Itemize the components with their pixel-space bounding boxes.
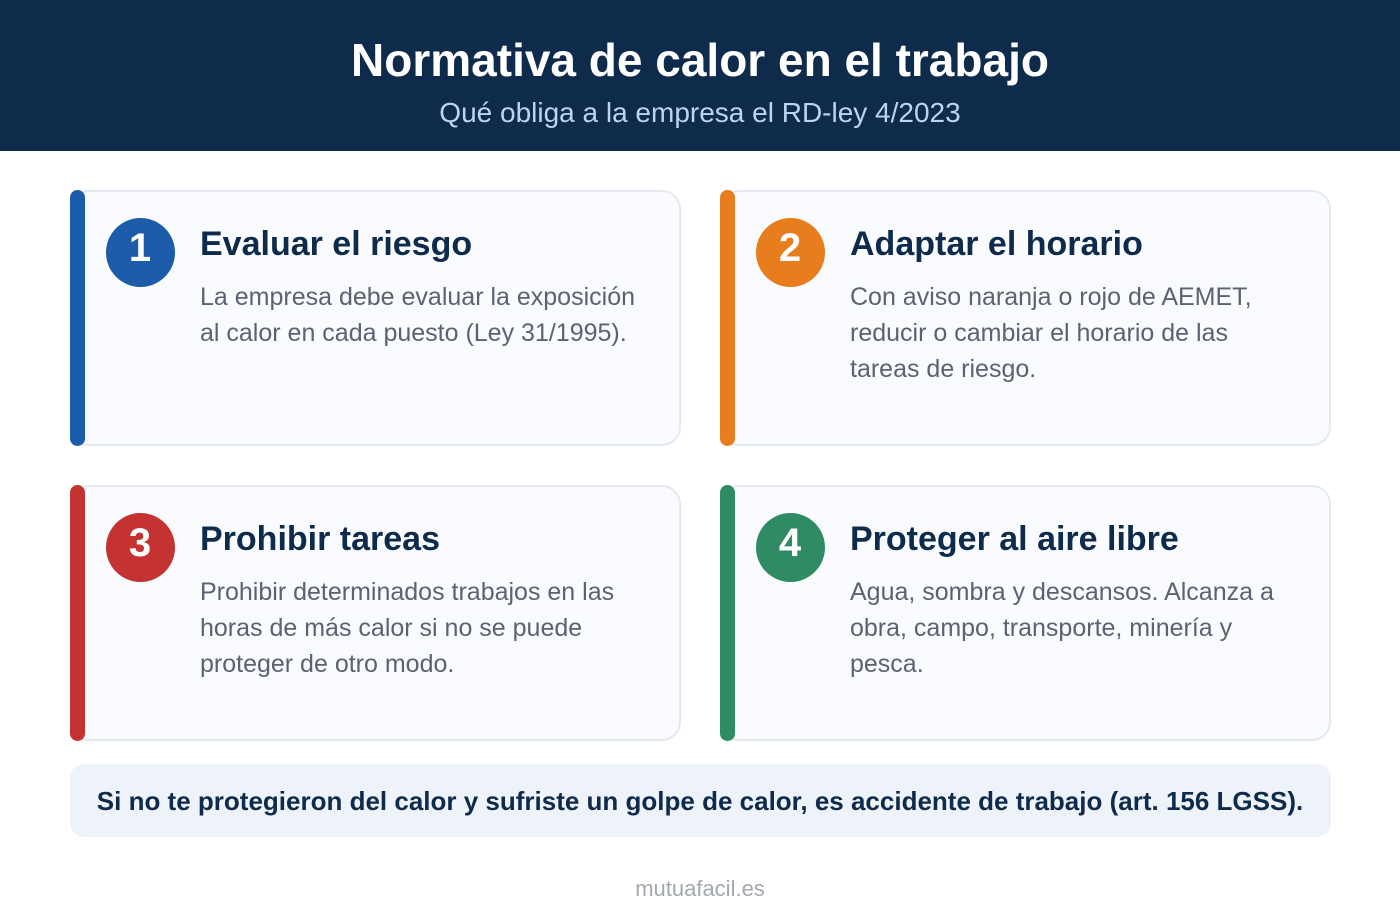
body text: al calor en cada puesto (Ley 31/1995).	[200, 319, 627, 347]
title: Normativa de calor en el trabajo	[351, 34, 1049, 86]
body text: Con aviso naranja o rojo de AEMET,	[850, 283, 1252, 311]
body text: reducir o cambiar el horario de las	[850, 319, 1228, 347]
heading: Evaluar el riesgo	[200, 225, 472, 263]
panel: proteger al aire libre	[720, 485, 1330, 741]
body text: proteger de otro modo.	[200, 650, 454, 678]
panel: prohibir tareas	[70, 485, 680, 741]
number badge 1: 1	[129, 226, 151, 270]
body text: horas de más calor si no se puede	[200, 614, 582, 642]
number badge 2: 2	[779, 226, 801, 270]
number badge 3	[106, 513, 175, 582]
number badge 1	[106, 218, 175, 287]
accent bar: red	[70, 485, 85, 741]
heading: Adaptar el horario	[850, 225, 1143, 263]
footer source: mutuafacil.es	[635, 876, 765, 901]
accent bar: orange	[720, 190, 735, 446]
body text: Prohibir determinados trabajos en las	[200, 578, 614, 606]
header banner	[0, 0, 1400, 151]
body text: Agua, sombra y descansos. Alcanza a	[850, 578, 1274, 606]
body text: La empresa debe evaluar la exposición	[200, 283, 635, 311]
body text: pesca.	[850, 650, 924, 678]
panel: adaptar el horario	[720, 190, 1330, 446]
number badge 4	[756, 513, 825, 582]
number badge 4: 4	[779, 521, 802, 565]
body text: tareas de riesgo.	[850, 355, 1036, 383]
subtitle: Qué obliga a la empresa el RD-ley 4/2023	[439, 97, 961, 128]
number badge 2	[756, 218, 825, 287]
number badge 3: 3	[129, 521, 151, 565]
heading: Prohibir tareas	[200, 520, 440, 558]
heading: Proteger al aire libre	[850, 520, 1179, 558]
callout	[70, 764, 1331, 837]
panel: evaluar el riesgo	[70, 190, 680, 446]
callout: Si no te protegieron del calor y sufriste un golpe de calor, es accidente de trabajo (art. 156 LGSS).	[97, 786, 1303, 816]
body text: obra, campo, transporte, minería y	[850, 614, 1233, 642]
accent bar: green	[720, 485, 735, 741]
accent bar: blue	[70, 190, 85, 446]
